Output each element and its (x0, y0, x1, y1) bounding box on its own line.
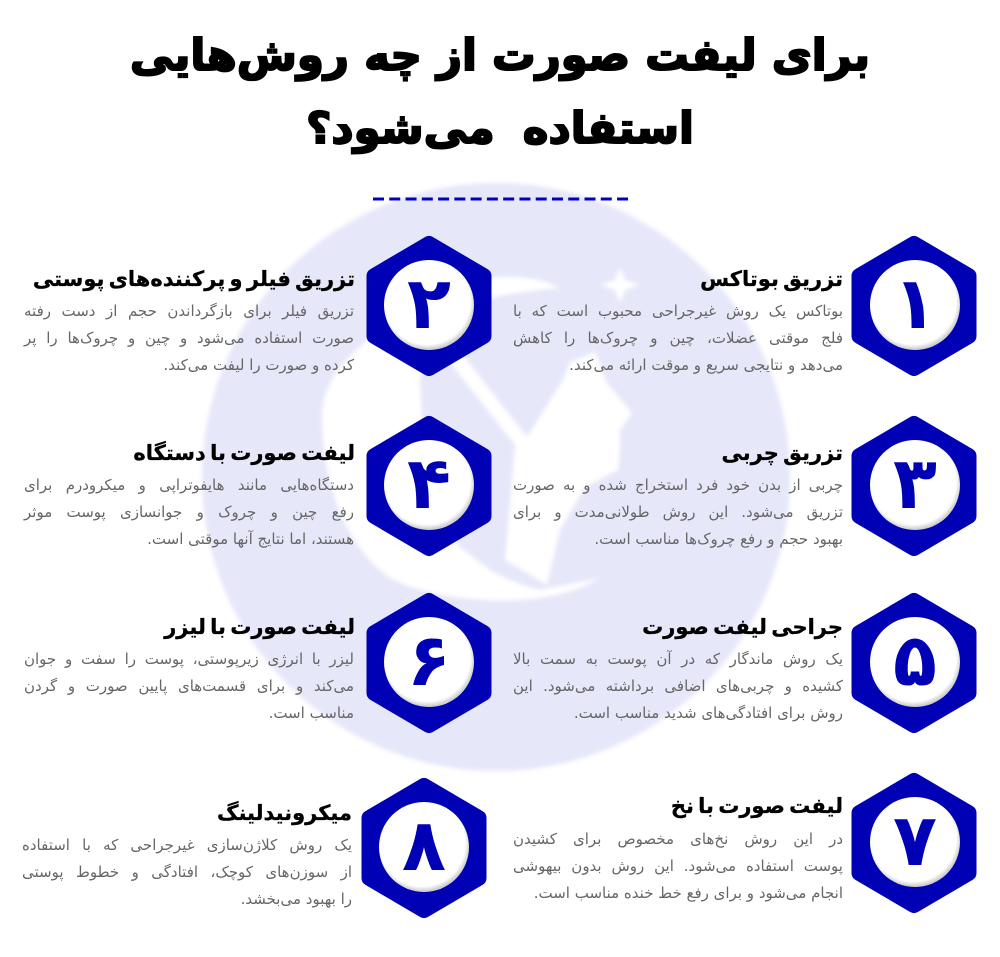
heading: لیفت صورت با نخ (671, 794, 843, 818)
text block: هستند، اما نتایج آنها موقتی است. (147, 530, 354, 548)
text block: صورت استفاده می‌شود و چین و چروک‌ها را پر (24, 329, 354, 347)
heading: تزریق بوتاکس (700, 267, 843, 291)
icon: hexagon number 4: ۴ (407, 441, 451, 525)
text block: یک روش کلاژن‌سازی غیرجراحی که با استفاده (22, 836, 352, 854)
icon: hexagon number 6: ۶ (407, 618, 451, 702)
icon: hexagon number 7 (852, 772, 976, 914)
icon: hexagon number 3 (852, 416, 976, 556)
panel: step 7 (513, 772, 976, 914)
text block: چربی از بدن خود فرد استخراج شده و به صورت (513, 476, 843, 494)
text block (24, 650, 354, 722)
panel: step 5 (513, 592, 976, 734)
text block: می‌کند و برای قسمت‌های پایین صورت و گردن (24, 677, 354, 695)
panel: step 3 (513, 416, 976, 556)
text block: یک روش ماندگار که در آن پوست به سمت بالا (513, 650, 843, 668)
title second line: استفاده می‌شود؟ (306, 104, 694, 154)
text block (513, 302, 843, 374)
icon: hexagon number 8 (362, 778, 486, 918)
panel: step 2 (23, 236, 492, 376)
text block (513, 830, 843, 902)
text block: دستگاه‌هایی مانند هایفوتراپی و میکرودرم برای (24, 476, 354, 494)
panel: step 6 (24, 592, 492, 734)
text block: لیزر با انرژی زیرپوستی، پوست را سفت و جوان (24, 650, 354, 668)
icon: hexagon number 6 (366, 592, 492, 734)
panel: step 8 (22, 778, 486, 918)
text block: تزریق می‌شود. این روش طولانی‌مدت و برای (513, 503, 843, 521)
icon: hexagon number 7: ۷ (893, 798, 937, 882)
icon: hexagon number 8: ۸ (402, 803, 446, 887)
icon: hexagon number 4 (366, 416, 492, 556)
icon: hexagon number 5 (852, 592, 976, 734)
heading: لیفت صورت با لیزر (164, 615, 355, 639)
text block (513, 650, 843, 722)
heading: تزریق فیلر و پرکننده‌های پوستی (33, 267, 355, 291)
text block: تزریق فیلر برای بازگرداندن حجم از دست رفته (24, 302, 354, 320)
icon: hexagon number 2: ۲ (407, 261, 451, 345)
heading: لیفت صورت با دستگاه (133, 441, 355, 465)
text block: در این روش نخ‌های مخصوص برای کشیدن (513, 830, 843, 848)
text block: فلج موقتی عضلات، چین و چروک‌ها را کاهش (513, 329, 843, 347)
panel: step 4 (23, 416, 492, 556)
title: برای لیفت صورت از چه روش‌هایی (130, 31, 870, 81)
text block (513, 476, 843, 548)
text block: از سوزن‌های کوچک، افتادگی و خطوط پوستی (22, 863, 352, 881)
dashed divider (373, 198, 628, 200)
icon: hexagon number 1 (852, 236, 976, 376)
heading: جراحی لیفت صورت (642, 615, 843, 639)
text block: بهبود حجم و رفع چروک‌ها مناسب است. (594, 530, 843, 548)
heading: میکرونیدلینگ (217, 801, 352, 825)
panel: step 1 (513, 236, 976, 376)
text block (23, 302, 354, 374)
text block: را بهبود می‌بخشد. (241, 890, 352, 908)
icon: hexagon number 3: ۳ (893, 441, 937, 525)
text block: کرده و صورت را لیفت می‌کند. (163, 356, 354, 374)
icon: hexagon number 2 (366, 236, 492, 376)
icon: hexagon number 1: ۱ (893, 261, 937, 345)
text block: می‌دهد و نتایجی سریع و موقت ارائه می‌کند. (569, 356, 843, 374)
text block: رفع چین و چروک و جوانسازی پوست موثر (24, 503, 354, 521)
text block (22, 836, 352, 908)
text block: انجام می‌شود و برای رفع خط خنده مناسب است. (534, 884, 843, 902)
text block: مناسب است. (269, 704, 354, 722)
icon: hexagon number 5: ۵ (893, 618, 937, 702)
text block: کشیده و چربی‌های اضافی برداشته می‌شود. این (513, 677, 843, 695)
text block (23, 476, 354, 548)
text block: بوتاکس یک روش غیرجراحی محبوب است که با (513, 302, 843, 320)
text block: پوست استفاده می‌شود. این روش بدون بیهوشی (513, 857, 843, 875)
text block: روش برای افتادگی‌های شدید مناسب است. (574, 704, 843, 722)
heading: تزریق چربی (722, 441, 843, 465)
